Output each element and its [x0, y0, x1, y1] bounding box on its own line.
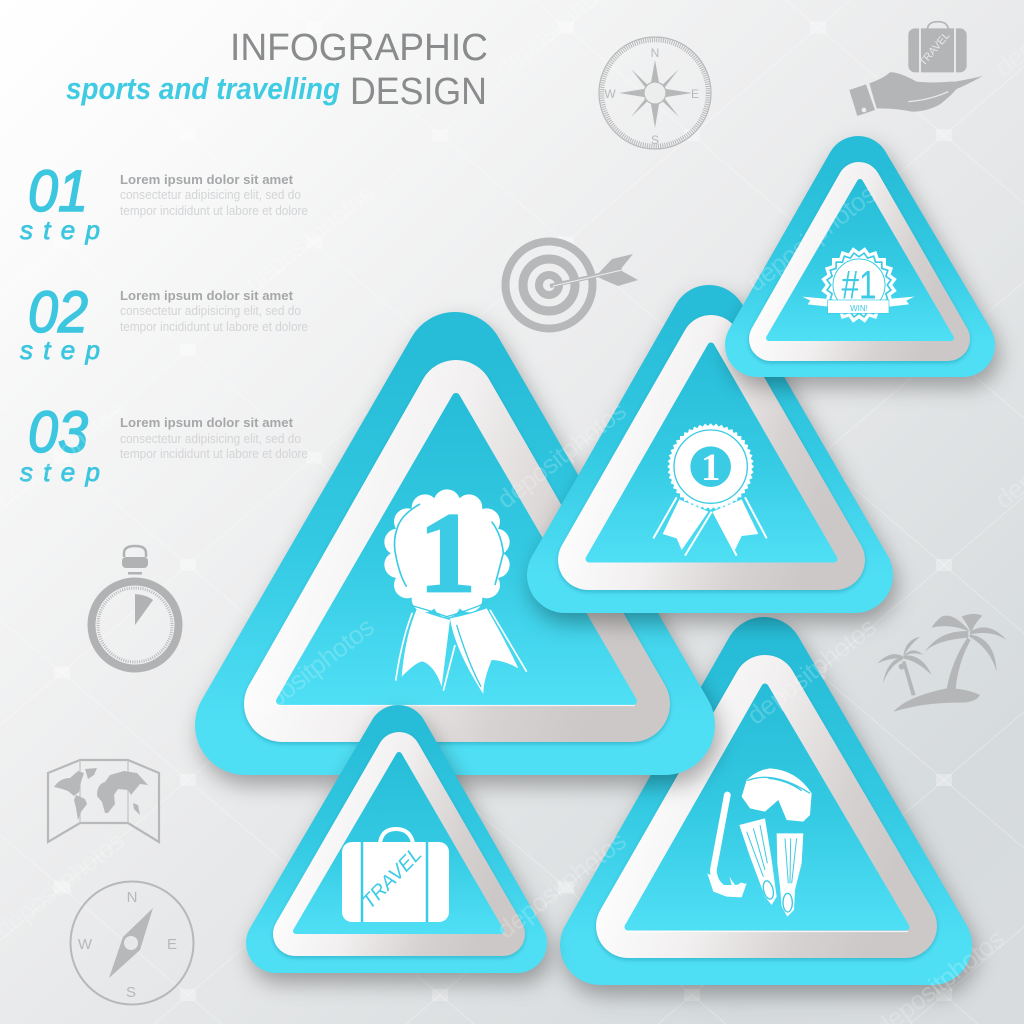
- inner blue field: [589, 346, 834, 559]
- outer blue triangle: [245, 362, 665, 725]
- step 03: step: [20, 457, 100, 487]
- panel: large medal triangle: [245, 362, 669, 735]
- step 03: [20, 400, 308, 487]
- title: sports and travelling: [66, 71, 340, 106]
- inner blue field: [280, 397, 633, 701]
- icon: suitcase: TRAVEL: [358, 844, 426, 913]
- icon: world map: [48, 760, 159, 842]
- icon: #1 badge: #1: [841, 263, 876, 307]
- icon: navigation compass: E: [167, 936, 177, 953]
- icon: palm island: [877, 614, 1007, 712]
- icon: rosette with ribbons: [384, 489, 527, 694]
- watermark text: depositphotos: [491, 825, 632, 944]
- icon: #1 badge: [802, 247, 914, 323]
- title: DESIGN: [350, 71, 487, 113]
- step 02: consectetur adipisicing elit, sed do: [120, 304, 301, 318]
- icon: #1 badge: WIN!: [850, 304, 868, 313]
- inner blue field: [296, 755, 501, 931]
- step 03: consectetur adipisicing elit, sed do: [120, 432, 301, 446]
- icon: mask, fins and snorkel: [707, 768, 812, 917]
- icon: rosette with ribbons: 1: [418, 490, 476, 618]
- step 01: 01: [28, 159, 88, 224]
- icon: stopwatch: [92, 546, 178, 668]
- step 02: [20, 280, 308, 365]
- watermark text: depositphotos: [491, 395, 632, 514]
- icon: seal with ribbons: [653, 423, 767, 556]
- icon: navigation compass: W: [78, 936, 93, 953]
- title: INFOGRAPHIC: [230, 27, 488, 69]
- icon: target with arrow: [506, 242, 638, 328]
- step 03: Lorem ipsum dolor sit amet: [120, 415, 294, 430]
- inner blue field: [628, 687, 906, 927]
- icon: compass rose: [599, 37, 711, 149]
- grey ring: [282, 398, 632, 704]
- inner blue field: [769, 182, 951, 338]
- step 02: 02: [28, 280, 88, 345]
- icon: compass rose: S: [651, 133, 659, 147]
- icon: compass rose: W: [604, 87, 616, 101]
- step 01: [20, 159, 308, 245]
- grey ring: [588, 345, 835, 560]
- panel: winner triangle: [757, 168, 967, 355]
- icon: navigation compass: N: [127, 889, 137, 906]
- outer blue triangle: [757, 168, 963, 345]
- outer blue triangle: [565, 323, 855, 575]
- step 01: tempor incididunt ut labore et dolore: [120, 204, 308, 218]
- icon: hand holding suitcase: TRAVEL: [917, 30, 952, 69]
- step 01: step: [20, 215, 100, 245]
- step 03: 03: [28, 400, 88, 465]
- step 01: consectetur adipisicing elit, sed do: [120, 188, 301, 202]
- watermark text: depositphotos: [239, 178, 380, 297]
- step 02: step: [20, 335, 100, 365]
- icon: suitcase: [342, 829, 449, 922]
- icon: navigation compass: [70, 882, 194, 1004]
- grey ring: [628, 687, 905, 926]
- icon: hand holding suitcase: [849, 22, 983, 116]
- step 03: tempor incididunt ut labore et dolore: [120, 447, 308, 461]
- icon: seal with ribbons: 1: [701, 445, 720, 489]
- panel: ribbon medal triangle: [565, 323, 859, 585]
- outer blue triangle: [600, 657, 932, 945]
- grey ring: [771, 184, 948, 339]
- step 01: Lorem ipsum dolor sit amet: [120, 172, 294, 187]
- step 02: tempor incididunt ut labore et dolore: [120, 320, 308, 334]
- icon: navigation compass: S: [126, 984, 136, 1001]
- watermark text: depositphotos: [741, 611, 882, 730]
- panel: snorkel triangle: [600, 657, 936, 955]
- step 02: Lorem ipsum dolor sit amet: [120, 288, 294, 303]
- icon: compass rose: E: [691, 87, 699, 101]
- title: [66, 27, 488, 113]
- watermark text: depositphotos: [239, 611, 380, 730]
- panel: travel triangle: [276, 735, 521, 953]
- watermark text: depositphotos: [741, 178, 882, 297]
- outer blue triangle: [276, 735, 517, 943]
- icon: compass rose: N: [651, 46, 659, 60]
- grey ring: [295, 754, 503, 934]
